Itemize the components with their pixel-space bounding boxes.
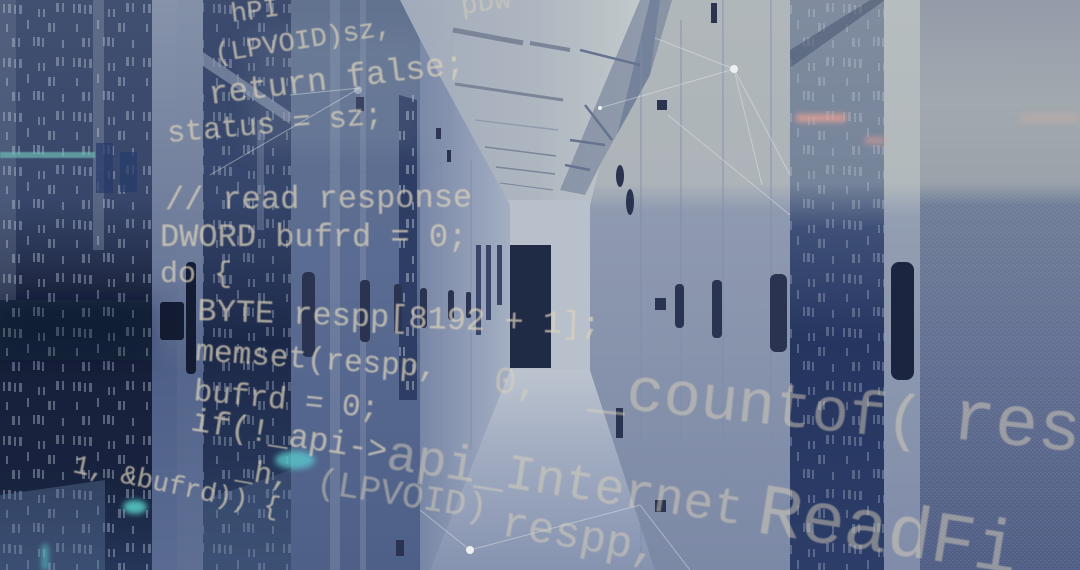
code line: countof: _countof(: [585, 353, 926, 459]
code line: LPVOID: (LPVOID): [313, 462, 490, 530]
coloured light streaks: [42, 113, 1080, 570]
dark inset rack strip: [399, 95, 417, 400]
floor: [430, 370, 655, 570]
code line: BYTE respp: BYTE respp[8192 + 1];: [197, 293, 601, 344]
right corridor wall: [590, 0, 790, 570]
code line: do: do {: [160, 258, 232, 292]
mesh panel: [920, 0, 1080, 570]
code line: return false: return false;: [207, 46, 467, 114]
code line: read response: // read response: [165, 179, 472, 219]
code line: LPVOID sz: (LPVOID)sz,: [213, 13, 393, 71]
code line: zero argument: 0,: [492, 361, 541, 408]
code line: h LPVOID: _h,: [232, 454, 292, 497]
light column: [152, 0, 203, 570]
left corridor wall near section: [290, 0, 420, 570]
code line: bufrd close: 1, &bufrd)) {: [70, 451, 282, 525]
corridor end: [498, 200, 619, 370]
door handles left: [160, 97, 502, 374]
network lines: [210, 38, 790, 570]
code line: api InternetRead: api_Internet: [382, 428, 747, 540]
cabinet details: [160, 0, 914, 570]
light haze: [0, 30, 430, 360]
left server rack: [0, 0, 155, 570]
teal streak: [0, 152, 95, 158]
left corridor wall far section: [420, 40, 510, 570]
code line: bufrd zero: bufrd = 0;: [192, 375, 381, 428]
ceiling beams: [453, 30, 640, 190]
pale column: [884, 0, 920, 570]
code line: DWORD bufrd: DWORD bufrd = 0;: [160, 219, 467, 256]
code line: status: status = sz;: [166, 99, 384, 152]
ceiling truss: [560, 0, 672, 195]
code line: if api: if(!_api->: [188, 403, 390, 471]
ceiling: [400, 0, 650, 205]
door handles right: [396, 3, 914, 556]
centre right rack: [790, 0, 885, 570]
second left rack: [203, 0, 291, 570]
code line: memset: memset(respp,: [194, 335, 438, 387]
